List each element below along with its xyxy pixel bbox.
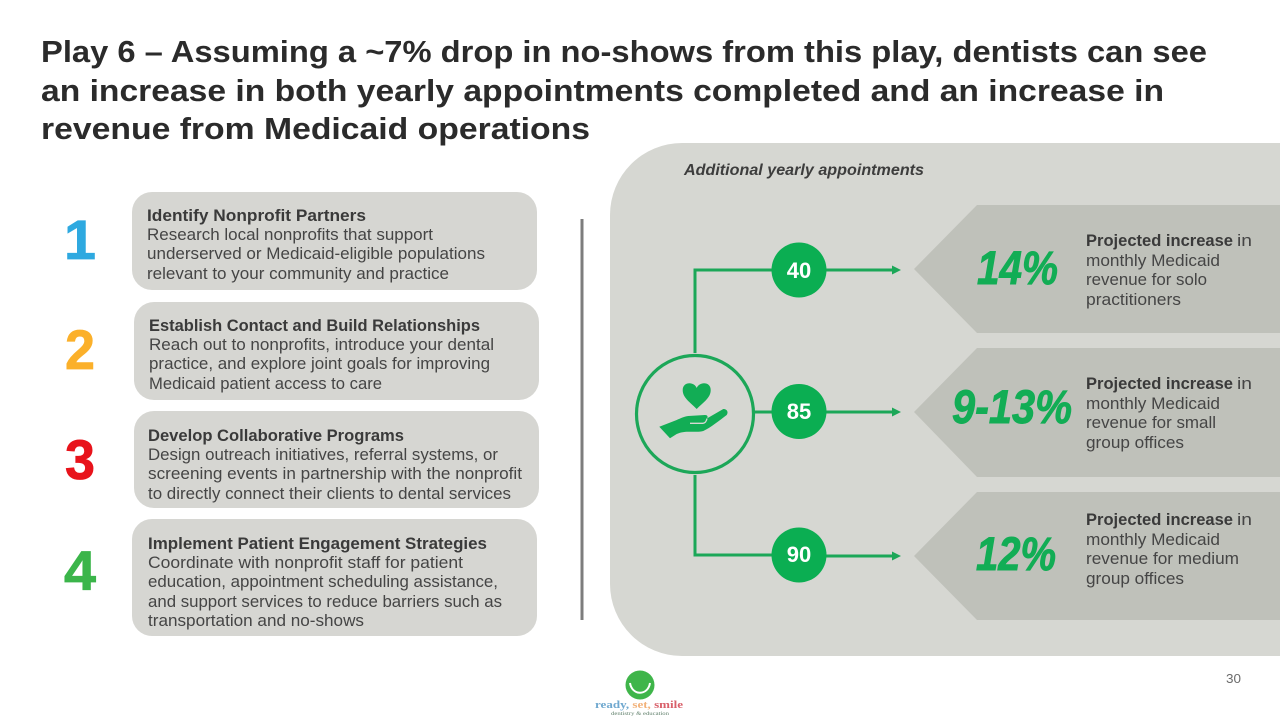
row 3 badge and arrow: 90 xyxy=(787,542,811,567)
title: an increase in both yearly appointments completed and an increase in xyxy=(41,73,1164,108)
row 2 badge and arrow xyxy=(772,384,901,439)
callout: solo practitioners: 14% xyxy=(977,241,1058,294)
number 2: 2 xyxy=(65,318,95,381)
callout: medium group offices: group offices xyxy=(1086,570,1184,588)
number 3: 3 xyxy=(65,428,95,491)
step 1 card: underserved or Medicaid-eligible populations xyxy=(147,245,485,263)
number 1: 1 xyxy=(64,208,96,271)
step 4 card: Coordinate with nonprofit staff for patient xyxy=(148,554,463,572)
callout: solo practitioners: monthly Medicaid xyxy=(1086,252,1220,270)
callout: small group offices: monthly Medicaid xyxy=(1086,395,1220,413)
callout: small group offices: group offices xyxy=(1086,434,1184,452)
step 3 card: Develop Collaborative Programs xyxy=(148,427,404,445)
step 2 card xyxy=(134,302,539,400)
step 1 card: Research local nonprofits that support xyxy=(147,226,433,244)
callout: solo practitioners: in xyxy=(1237,232,1252,250)
callout: solo practitioners: revenue for solo xyxy=(1086,271,1207,289)
number 4: 4 xyxy=(64,539,96,602)
step 3 card: screening events in partnership with the nonprofit xyxy=(148,465,522,483)
icon: hub circle with hand and heart xyxy=(636,356,754,472)
row 3 badge and arrow xyxy=(772,528,901,582)
step 2 card: Medicaid patient access to care xyxy=(149,375,382,393)
step 4 card: and support services to reduce barriers such as xyxy=(148,593,502,611)
callout: medium group offices: Projected increase xyxy=(1086,511,1233,529)
step 2 card: practice, and explore joint goals for improving xyxy=(149,355,490,373)
callout: solo practitioners: Projected increase xyxy=(1086,232,1233,250)
callout: medium group offices: in xyxy=(1237,511,1252,529)
connector lines xyxy=(695,270,772,555)
row 1 badge and arrow: 40 xyxy=(787,258,811,283)
callout: medium group offices: revenue for medium xyxy=(1086,550,1239,568)
step 4 card xyxy=(132,519,537,636)
step 2 card: Establish Contact and Build Relationships xyxy=(149,317,480,335)
callout: medium group offices: monthly Medicaid xyxy=(1086,531,1220,549)
callout: small group offices xyxy=(914,348,1280,477)
title xyxy=(41,34,1207,146)
panel heading: Additional yearly appointments xyxy=(683,162,924,179)
logo: ready, set, smile: ready, set, smile xyxy=(595,700,683,711)
callout: small group offices: revenue for small xyxy=(1086,414,1216,432)
row 2 badge and arrow: 85 xyxy=(787,399,811,424)
panel: additional appointments background xyxy=(610,143,1280,656)
step 3 card: to directly connect their clients to dental services xyxy=(148,485,511,503)
row 1 badge and arrow xyxy=(772,242,901,298)
callout: medium group offices xyxy=(914,492,1280,620)
title: Play 6 – Assuming a ~7% drop in no-shows from this play, dentists can see xyxy=(41,34,1207,69)
callout: solo practitioners xyxy=(914,205,1280,333)
step 2 card: Reach out to nonprofits, introduce your dental xyxy=(149,336,494,354)
callout: small group offices: 9-13% xyxy=(952,380,1072,433)
title: revenue from Medicaid operations xyxy=(41,111,590,146)
step 1 card: Identify Nonprofit Partners xyxy=(147,207,366,225)
step 4 card: education, appointment scheduling assistance, xyxy=(148,573,498,591)
callout: solo practitioners: practitioners xyxy=(1086,291,1181,309)
callout: medium group offices: 12% xyxy=(976,527,1056,580)
step 1 card xyxy=(132,192,537,290)
logo: ready, set, smile xyxy=(595,670,683,717)
step 4 card: transportation and no-shows xyxy=(148,612,364,630)
step 4 card: Implement Patient Engagement Strategies xyxy=(148,535,487,553)
callout: small group offices: Projected increase xyxy=(1086,375,1233,393)
step 3 card: Design outreach initiatives, referral systems, or xyxy=(148,446,499,464)
page number: 30 xyxy=(1226,671,1241,686)
step 1 card: relevant to your community and practice xyxy=(147,265,449,283)
callout: small group offices: in xyxy=(1237,375,1252,393)
step 3 card xyxy=(134,411,539,508)
logo: ready, set, smile: dentistry & education xyxy=(611,711,669,717)
